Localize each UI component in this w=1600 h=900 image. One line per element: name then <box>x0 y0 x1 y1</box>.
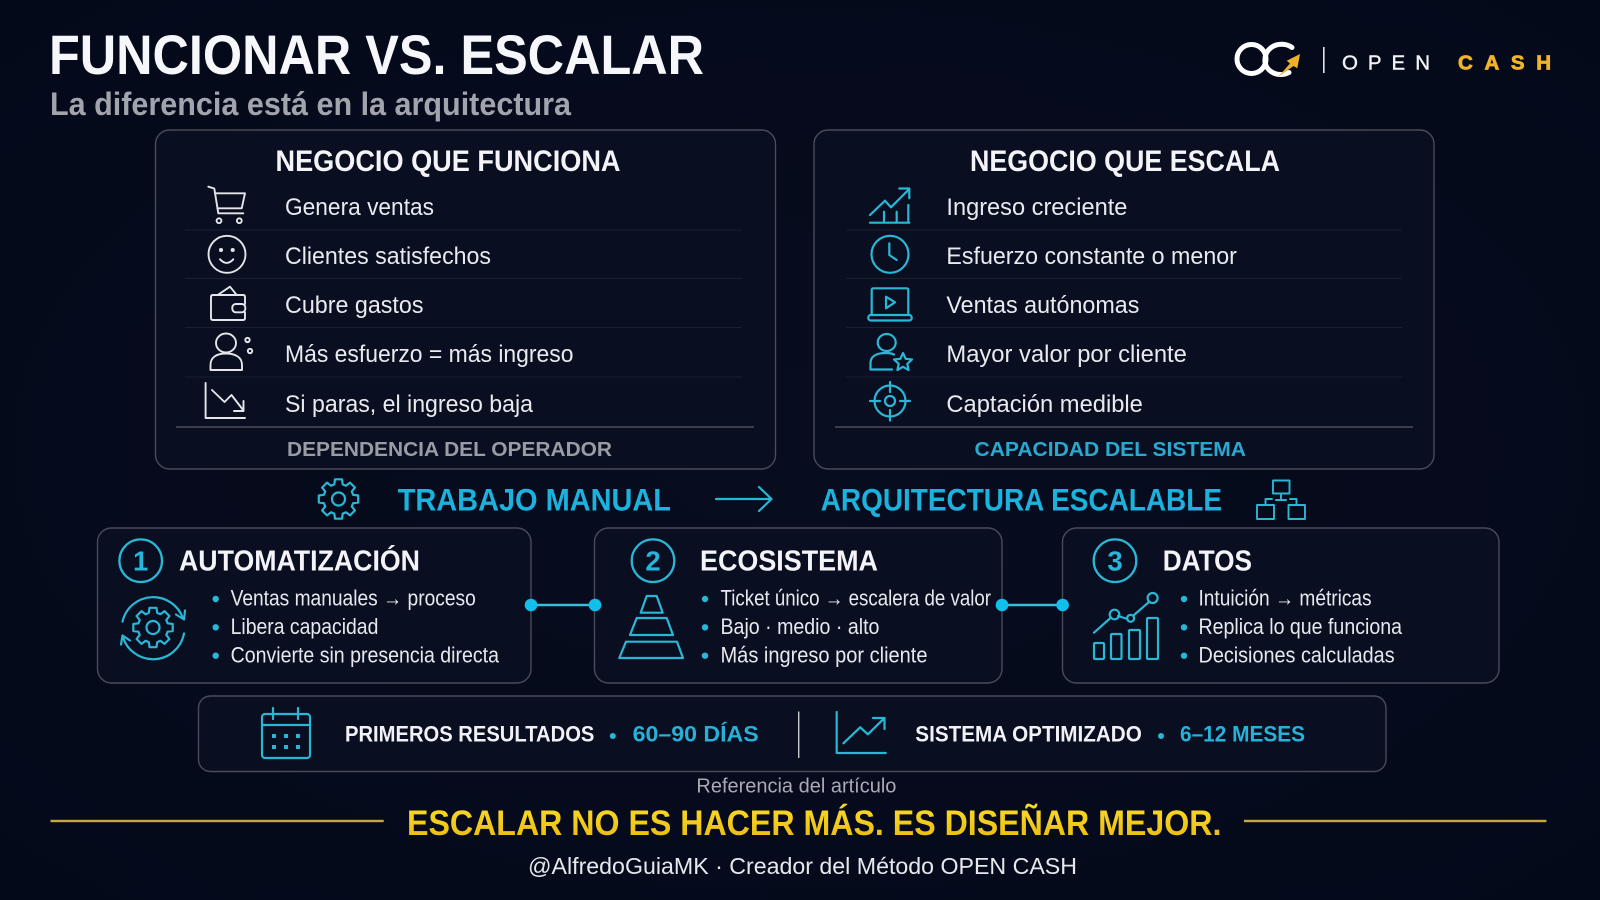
number badge 1 <box>119 539 162 582</box>
icon: network <box>1257 480 1305 519</box>
icon: calendar <box>262 708 310 758</box>
icon: clock <box>872 236 908 273</box>
title: FUNCIONAR VS. ESCALAR <box>49 23 704 86</box>
label: sistema optimizado: SISTEMA OPTIMIZADO <box>915 722 1142 747</box>
heading: negocio que funciona: NEGOCIO QUE FUNCIONA <box>276 145 620 178</box>
icon: wallet <box>211 287 245 320</box>
bullet list: Intuición → métricas <box>1198 586 1372 611</box>
icon: person with star <box>870 334 912 370</box>
icon: smile <box>208 236 246 273</box>
item: mas esfuerzo: Más esfuerzo = más ingreso <box>285 341 574 368</box>
subtitle: La diferencia está en la arquitectura <box>50 86 571 122</box>
logo wordmark CASH: CASH <box>1458 51 1551 74</box>
item: clientes satisfechos: Clientes satisfechos <box>285 243 491 270</box>
icon: pyramid <box>619 596 683 658</box>
icon: gear <box>319 479 358 519</box>
panel: datos <box>1062 528 1499 683</box>
reference note: Referencia del artículo <box>696 775 896 798</box>
timeline bar <box>198 696 1386 772</box>
heading: automatización: AUTOMATIZACIÓN <box>179 546 420 578</box>
item: ingreso creciente: Ingreso creciente <box>946 194 1127 221</box>
heading: datos: DATOS <box>1163 546 1252 578</box>
connector 2 to 3 <box>996 599 1069 611</box>
closing statement: ESCALAR NO ES HACER MÁS. ES DISEÑAR MEJOR. <box>407 803 1221 843</box>
label: primeros resultados: PRIMEROS RESULTADOS <box>345 722 594 747</box>
bullet list <box>702 586 991 668</box>
bullet list <box>1181 586 1403 668</box>
icon: gear cycle <box>121 597 185 659</box>
icon: data chart <box>1094 593 1158 659</box>
number badge 2 <box>632 539 674 582</box>
icon: laptop with play <box>868 288 912 320</box>
item: esfuerzo constante: Esfuerzo constante o menor <box>946 243 1237 270</box>
logo: Open Cash <box>1237 44 1551 77</box>
panel: negocio que funciona <box>156 130 776 469</box>
number badge 2: 2 <box>645 545 661 576</box>
item: cubre gastos: Cubre gastos <box>285 292 424 319</box>
label: trabajo manual: TRABAJO MANUAL <box>398 482 671 518</box>
item: mayor valor: Mayor valor por cliente <box>946 341 1187 368</box>
icon: person with sweat <box>210 334 252 370</box>
bullet list: Bajo · medio · alto <box>720 614 879 639</box>
item: genera ventas: Genera ventas <box>285 194 434 221</box>
panel: ecosistema <box>594 528 1002 683</box>
bullet list: Ventas manuales → proceso <box>231 586 476 611</box>
bullet list: Más ingreso por cliente <box>720 643 928 668</box>
bullet list: Libera capacidad <box>231 614 378 639</box>
bullet list: Decisiones calculadas <box>1198 643 1395 668</box>
label: arquitectura escalable: ARQUITECTURA ESCALABLE <box>821 482 1222 518</box>
heading: negocio que escala: NEGOCIO QUE ESCALA <box>970 145 1280 178</box>
bullet list: Ticket único → escalera de valor <box>720 586 991 611</box>
footer: dependencia del operador: DEPENDENCIA DEL OPERADOR <box>287 438 612 461</box>
logo wordmark OPEN: OPEN <box>1342 51 1430 74</box>
icon: falling chart <box>206 383 245 418</box>
separator dot <box>610 733 616 739</box>
connector 1 to 2 <box>525 599 601 611</box>
item: ventas autonomas: Ventas autónomas <box>946 292 1139 319</box>
bullet list: Convierte sin presencia directa <box>231 643 500 668</box>
value: 6-12 meses: 6–12 MESES <box>1180 722 1305 747</box>
icon: rising chart <box>837 712 886 753</box>
number badge 1: 1 <box>133 545 148 576</box>
footer: capacidad del sistema: CAPACIDAD DEL SISTEMA <box>974 438 1246 461</box>
heading: ecosistema: ECOSISTEMA <box>700 546 878 578</box>
number badge 3 <box>1094 539 1136 582</box>
separator dot <box>1158 733 1164 739</box>
transition banner <box>319 479 1305 519</box>
icon: growth chart <box>870 188 909 223</box>
item: si paras: Si paras, el ingreso baja <box>285 391 534 418</box>
logo mark <box>1237 44 1300 77</box>
bullet list: Replica lo que funciona <box>1198 614 1403 639</box>
icon: cart <box>208 187 245 223</box>
panel: automatización <box>98 528 531 683</box>
panel: negocio que escala <box>814 130 1434 469</box>
bullet list <box>212 586 500 668</box>
timeline divider <box>798 712 799 758</box>
item: captacion medible: Captación medible <box>946 391 1143 418</box>
icon: target <box>870 382 910 420</box>
logo divider <box>1323 47 1325 73</box>
number badge 3: 3 <box>1107 545 1123 576</box>
arrow <box>716 487 772 511</box>
author credit: @AlfredoGuiaMK · Creador del Método OPEN CASH <box>528 853 1077 879</box>
value: 60-90 dias: 60–90 DÍAS <box>633 722 759 747</box>
